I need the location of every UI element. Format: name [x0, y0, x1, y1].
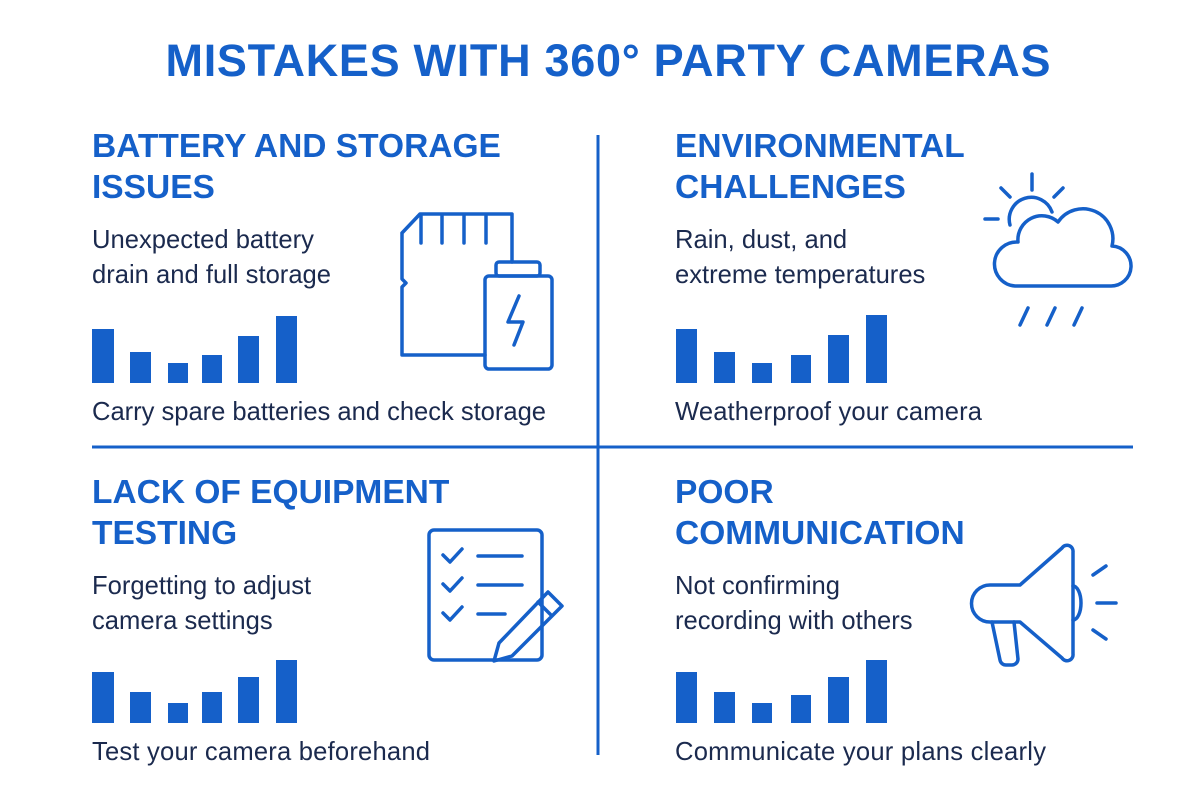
- icon: checklist with pencil: [429, 530, 562, 661]
- bar chart: battery: [92, 316, 297, 383]
- text: communication tip: Communicate your plans clearly: [675, 738, 1046, 766]
- text: testing tip: Test your camera beforehand: [92, 738, 430, 766]
- bar chart: communication: [676, 660, 887, 723]
- icon: sun and cloud: [985, 174, 1131, 325]
- panel: environmental: [675, 128, 1131, 426]
- text: environmental description: extreme temperatures: [675, 261, 925, 289]
- heading: testing: TESTING: [92, 515, 237, 552]
- panel: communication: [675, 474, 1116, 766]
- text: environmental description: Rain, dust, and: [675, 226, 847, 254]
- heading: environmental: ENVIRONMENTAL: [675, 128, 965, 165]
- bar chart: testing: [92, 660, 297, 723]
- heading: testing: LACK OF EQUIPMENT: [92, 474, 450, 511]
- heading: communication: POOR: [675, 474, 774, 511]
- heading: battery: ISSUES: [92, 169, 215, 206]
- panel: battery and storage: [92, 128, 552, 426]
- panel: equipment testing: [92, 474, 562, 766]
- heading: environmental: CHALLENGES: [675, 169, 906, 206]
- text: battery description: Unexpected battery: [92, 226, 314, 254]
- text: testing description: camera settings: [92, 607, 273, 635]
- text: communication description: Not confirming: [675, 572, 840, 600]
- bar chart: environmental: [676, 315, 887, 383]
- text: environmental tip: Weatherproof your camera: [675, 398, 983, 426]
- title: MISTAKES WITH 360° PARTY CAMERAS: [166, 35, 1050, 86]
- heading: battery: BATTERY AND STORAGE: [92, 128, 501, 165]
- heading: communication: COMMUNICATION: [675, 515, 965, 552]
- text: communication description: recording with others: [675, 607, 913, 635]
- text: battery tip: Carry spare batteries and check storage: [92, 398, 546, 426]
- text: testing description: Forgetting to adjust: [92, 572, 311, 600]
- icon: sd card and battery: [402, 214, 552, 369]
- icon: megaphone: [972, 545, 1116, 665]
- text: battery description: drain and full storage: [92, 261, 331, 289]
